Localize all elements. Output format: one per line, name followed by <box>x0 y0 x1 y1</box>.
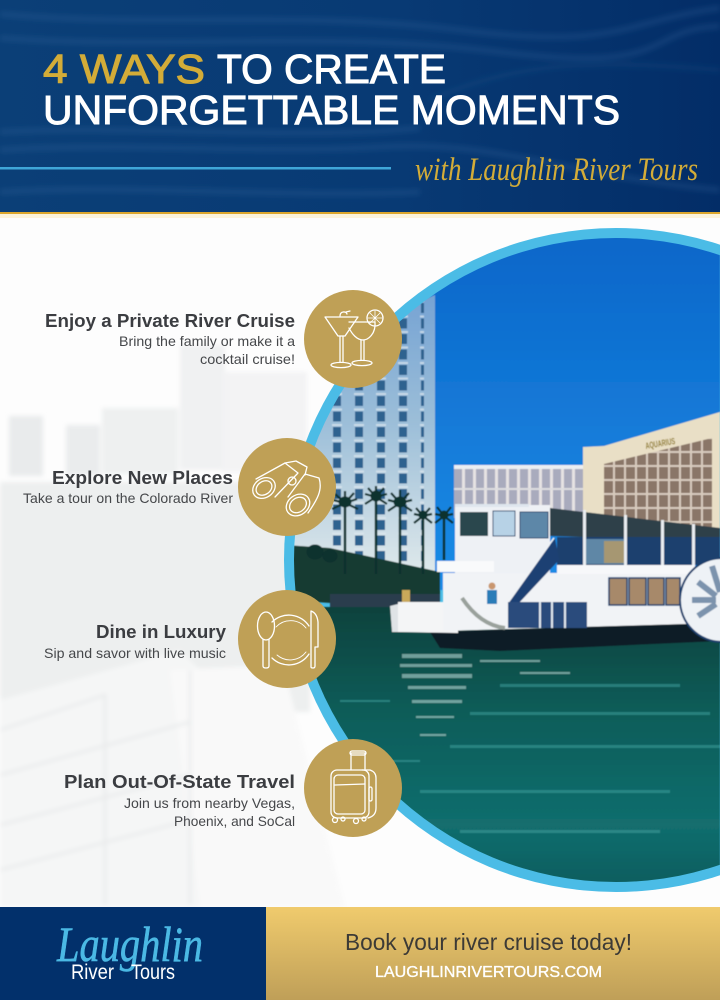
sky <box>428 238 720 591</box>
description: Bring the family or make it a <box>119 333 295 349</box>
title: UNFORGETTABLE MOMENTS <box>43 87 620 133</box>
description: Take a tour on the Colorado River <box>23 490 233 506</box>
logo: River <box>71 961 114 984</box>
icon: place setting <box>238 590 336 688</box>
icon: binoculars <box>238 438 336 536</box>
people <box>487 590 497 604</box>
faded background photo <box>0 345 345 907</box>
heading: Enjoy a Private River Cruise <box>45 310 295 331</box>
logo: Tours <box>131 961 175 984</box>
header band <box>0 0 720 212</box>
footer: logo panel <box>0 907 266 1000</box>
description: Join us from nearby Vegas, <box>124 795 295 811</box>
hotels: AQUARIUS <box>645 436 676 451</box>
trees and shoreline <box>294 545 441 604</box>
description: Sip and savor with live music <box>44 645 226 661</box>
stairs <box>508 538 559 604</box>
item: private river cruise <box>45 290 402 388</box>
logo <box>56 916 203 984</box>
photo ring <box>284 228 720 892</box>
accent line <box>0 167 391 170</box>
lower railing <box>508 602 587 628</box>
item: out-of-state travel <box>64 739 402 837</box>
description: Phoenix, and SoCal <box>174 813 295 829</box>
boat <box>390 504 720 651</box>
icon: suitcase <box>304 739 402 837</box>
title: 4 WAYS <box>43 46 205 92</box>
footer: call to action <box>266 907 720 1000</box>
main deck body <box>443 573 720 631</box>
photo: river boat <box>280 230 720 897</box>
upper railing <box>557 537 720 565</box>
tower <box>285 295 435 585</box>
pilot windows <box>460 512 488 536</box>
description <box>119 333 295 367</box>
heading: Dine in Luxury <box>96 621 227 642</box>
cabin windows <box>609 578 680 605</box>
canopy <box>550 508 720 541</box>
palms <box>307 486 453 574</box>
heading: Explore New Places <box>52 467 233 488</box>
description: cocktail cruise! <box>200 351 295 367</box>
icon: cocktails <box>304 290 402 388</box>
description <box>124 795 295 829</box>
hotels <box>453 411 720 529</box>
pilot house <box>455 505 550 573</box>
water <box>316 606 720 882</box>
title: TO CREATE <box>217 46 446 92</box>
logo: Laughlin <box>56 916 203 972</box>
cta text: Book your river cruise today! <box>345 929 632 955</box>
item: dine in luxury <box>44 590 336 688</box>
item: explore new places <box>23 438 336 536</box>
title <box>43 46 620 133</box>
heading: Plan Out-Of-State Travel <box>64 771 295 792</box>
website: LAUGHLINRIVERTOURS.COM <box>375 964 602 981</box>
gold divider <box>0 212 720 214</box>
paddle wheel <box>680 558 720 642</box>
hull <box>430 622 720 651</box>
reflections <box>400 654 570 736</box>
front deck <box>398 602 458 633</box>
